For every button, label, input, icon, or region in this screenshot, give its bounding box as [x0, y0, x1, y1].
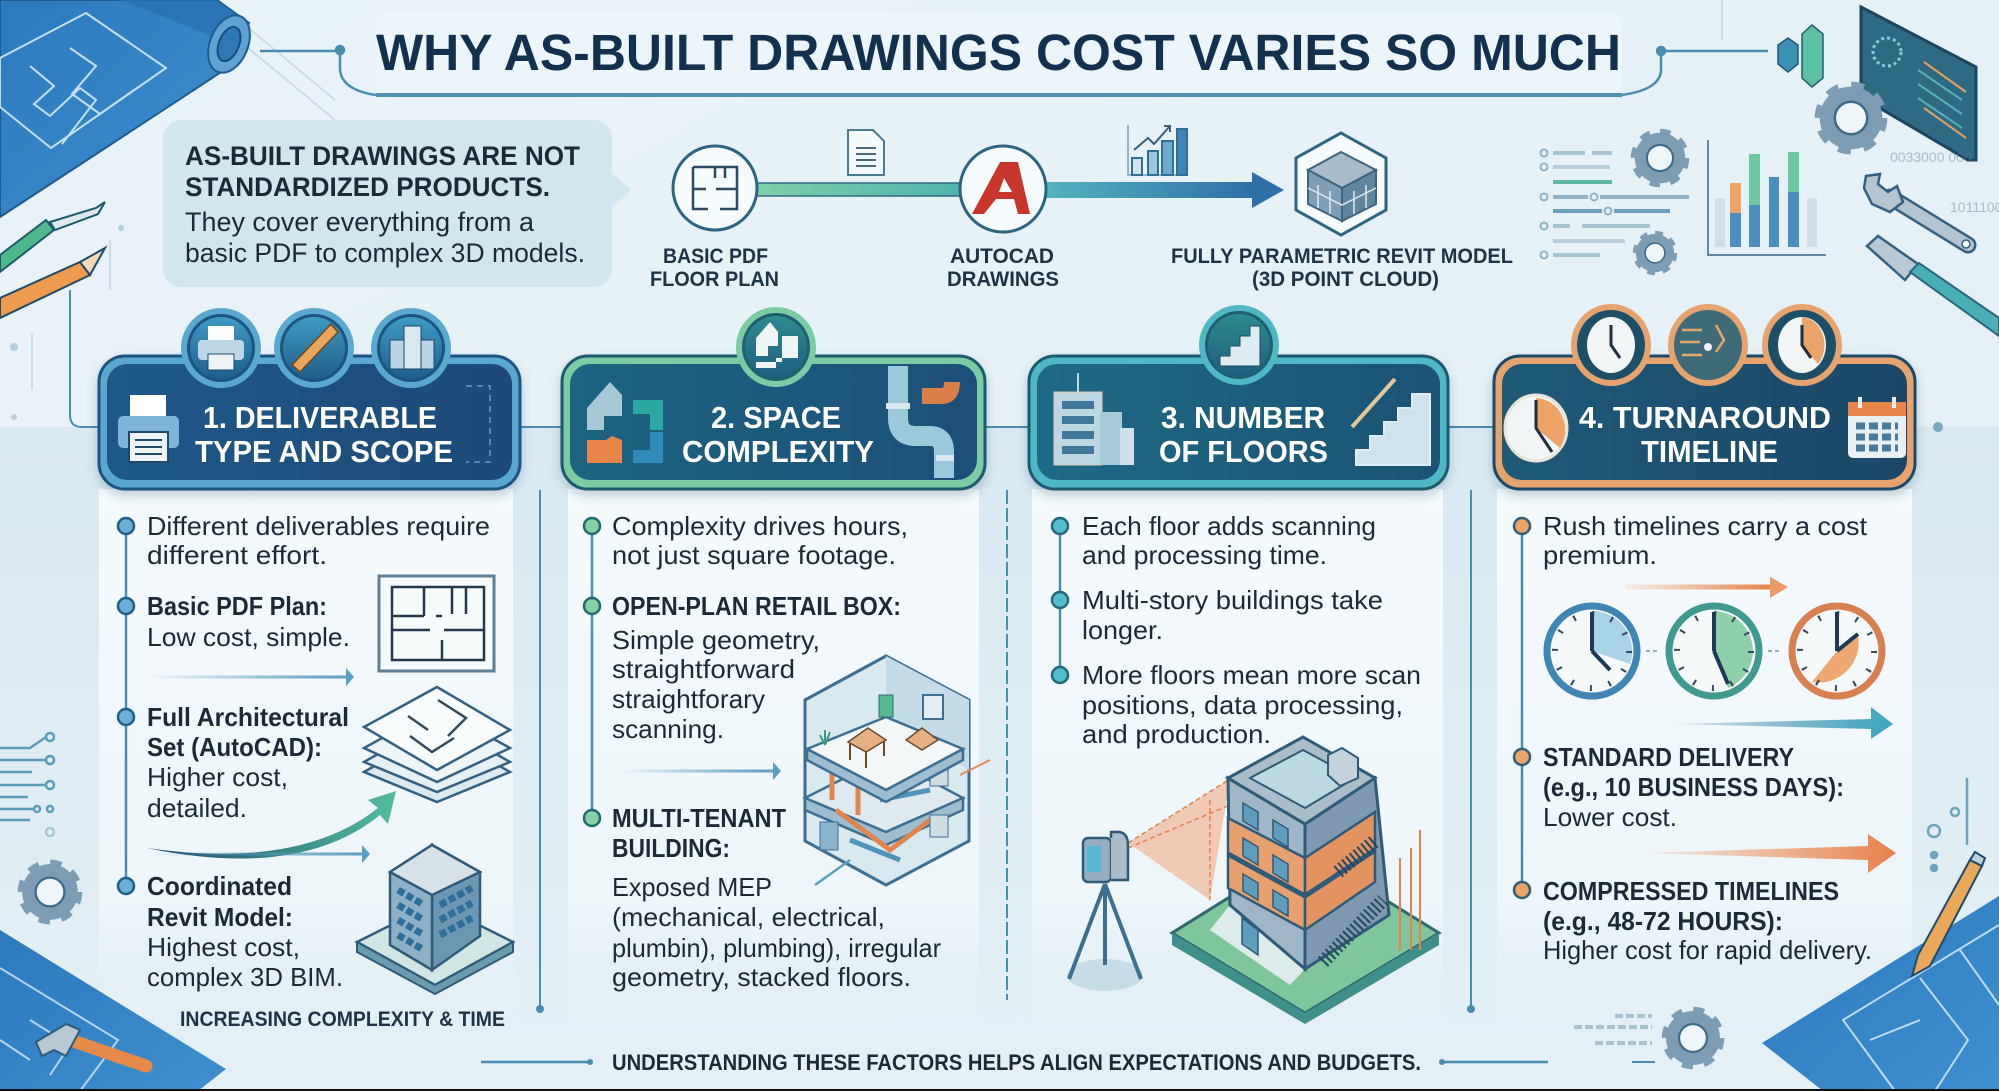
text: standard delivery: (e.g., 10 BUSINESS DAYS): [1543, 772, 1844, 802]
timeline rail [118, 518, 134, 894]
label: AutoCAD drawings: AUTOCAD [950, 245, 1054, 268]
left connector line [70, 290, 1494, 427]
text: coordinated Revit model: Highest cost, [147, 932, 300, 962]
illustration: stacked sheets [364, 687, 510, 802]
header card 4: TIMELINE [1641, 434, 1778, 469]
text: basic PDF plan: Low cost, simple. [147, 622, 350, 652]
text: open-plan retail box: straightforary [612, 684, 765, 714]
text: multi-tenant building: (mechanical, electrical, [612, 902, 885, 932]
icon: floor shapes [587, 382, 663, 463]
text: intro: different effort. [147, 540, 327, 570]
illustration: isometric building on platform [357, 845, 513, 994]
clock: blue [1547, 606, 1637, 696]
icon: calendar [1848, 397, 1906, 458]
header card 2: 2. SPACE [711, 400, 841, 435]
text: each floor: and processing time. [1082, 540, 1327, 570]
icon: stairs with pencil [1352, 379, 1430, 465]
icon: AutoCAD logo [960, 146, 1046, 232]
icon: cable plug [1867, 236, 1999, 336]
illustration: floor plan sheet [379, 576, 494, 671]
progress bar: green segment [755, 183, 965, 196]
arrow: small 1 [150, 668, 354, 686]
progress arrow [1040, 172, 1284, 208]
text: multi-tenant building: BUILDING: [612, 833, 730, 863]
divider 3 [1467, 490, 1475, 1013]
text: basic PDF plan: Basic PDF Plan: [147, 591, 327, 621]
text: multi-story: Multi-story buildings take [1082, 585, 1383, 615]
illustration: isometric building [1172, 737, 1439, 1024]
icon: clock [1505, 395, 1567, 461]
arrow: orange small [1625, 577, 1788, 598]
divider 1 [536, 490, 544, 1013]
title connector left [260, 46, 376, 95]
header card 3: OF FLOORS [1159, 434, 1328, 469]
header card 1 [99, 356, 520, 489]
footer arrow left [481, 1059, 593, 1065]
divider 2 [1006, 490, 1008, 1000]
footer text: UNDERSTANDING THESE FACTORS HELPS ALIGN EXPECTATIONS AND BUDGETS. [612, 1050, 1421, 1075]
text: full architectural set [147, 702, 349, 823]
text: more floors: More floors mean more scan [1082, 660, 1421, 690]
header card 1: TYPE AND SCOPE [195, 434, 453, 469]
panel: number of floors [1029, 305, 1448, 1039]
icon badge: building [371, 308, 451, 388]
title band [376, 12, 1622, 92]
corner illustration: blueprint roll [0, 0, 258, 217]
text: each floor: Each floor adds scanning [1082, 511, 1376, 541]
header card 4: 4. TURNAROUND [1579, 400, 1831, 435]
timeline rail [1052, 518, 1068, 683]
binary decoration [1890, 149, 1999, 215]
label: Revit model: (3D POINT CLOUD) [1252, 268, 1439, 291]
text: coordinated Revit model [147, 871, 343, 992]
title: WHY AS-BUILT DRAWINGS COST VARIES SO MUCH [376, 24, 1621, 81]
title connector right [1622, 47, 1768, 95]
illustration: laser scanner on tripod [1067, 779, 1230, 991]
arrow: orange large [1644, 834, 1896, 873]
arrow: small [622, 762, 781, 780]
header card 3: 3. NUMBER [1161, 400, 1325, 435]
text: standard delivery [1543, 742, 1844, 832]
clock: green [1669, 606, 1759, 696]
label: AutoCAD drawings: DRAWINGS [947, 268, 1059, 291]
icon: rising bar chart [1128, 125, 1188, 175]
text: multi-tenant building [612, 803, 941, 992]
timeline rail [584, 518, 600, 826]
side dots lower right [1928, 778, 1967, 871]
text: intro: Complexity drives hours, [612, 511, 908, 541]
text: each floor [1082, 511, 1376, 570]
text: multi-story: longer. [1082, 615, 1163, 645]
label: basic PDF floor plan: FLOOR PLAN [650, 268, 779, 291]
circuit decoration left [0, 733, 54, 836]
corner illustration: blueprint lower left [0, 930, 226, 1091]
text: multi-tenant building: geometry, stacked floors. [612, 962, 911, 992]
faint construction lines [32, 0, 1980, 390]
label: Revit model: FULLY PARAMETRIC REVIT MODEL [1171, 245, 1513, 268]
text: compressed timelines [1543, 876, 1872, 965]
icon: gear bottom [1664, 1009, 1722, 1067]
timeline rail [1514, 518, 1530, 898]
icon: office building [1054, 373, 1134, 465]
title rule [376, 93, 1622, 97]
text: standard delivery: STANDARD DELIVERY [1543, 742, 1794, 772]
panel: deliverable type and scope [99, 308, 520, 1039]
text: full architectural set: Set (AutoCAD): [147, 732, 322, 762]
corner illustration: blueprint lower right [1762, 896, 1999, 1091]
text: open-plan retail box [612, 591, 901, 744]
icon badge: ruler [274, 308, 354, 388]
text: multi-story [1082, 585, 1383, 645]
icon: Revit hexagon [1296, 133, 1386, 235]
chart: decorative bar chart [1708, 140, 1826, 255]
text: compressed timelines: Higher cost for rapid delivery. [1543, 935, 1872, 965]
icon badge: floor shapes [736, 307, 816, 387]
text: coordinated Revit model: Revit Model: [147, 902, 293, 932]
label: AutoCAD drawings [947, 245, 1059, 291]
icon: hammer [36, 1024, 146, 1066]
text: rush timelines [1543, 511, 1868, 570]
text: compressed timelines: (e.g., 48-72 HOURS): [1543, 906, 1783, 936]
icon: wrench [1864, 174, 1970, 248]
header card 3 [1029, 356, 1448, 489]
label: basic PDF floor plan: BASIC PDF [663, 245, 768, 268]
intro callout: AS-BUILT DRAWINGS ARE NOT [185, 141, 580, 171]
arrow: rising curve [147, 791, 396, 859]
icon badge: stairs [1199, 305, 1279, 385]
text: coordinated Revit model: complex 3D BIM. [147, 962, 343, 992]
connectors between clocks [1646, 650, 1782, 652]
header card 2 [562, 356, 985, 489]
icon badge: speed clock [1668, 304, 1748, 386]
text: multi-tenant building: Exposed MEP [612, 872, 772, 902]
icon: gear lower left [21, 863, 79, 921]
text: open-plan retail box: scanning. [612, 714, 724, 744]
arrow: small 2 [150, 845, 370, 863]
text: multi-tenant building: MULTI-TENANT [612, 803, 786, 833]
icon: basic PDF floor plan [673, 146, 757, 230]
bottom edge line [0, 1089, 1999, 1091]
text: compressed timelines: COMPRESSED TIMELINES [1543, 876, 1839, 906]
icon: orange pencil [0, 248, 105, 318]
text: open-plan retail box: Simple geometry, [612, 625, 820, 655]
text: intro [147, 511, 490, 570]
corner illustration: monitor and building blocks [1778, 7, 1976, 160]
intro callout: They cover everything from a [185, 207, 535, 237]
text: rush timelines: Rush timelines carry a cost [1543, 511, 1868, 541]
header card 1: 1. DELIVERABLE [203, 400, 437, 435]
icon badge: clock 1 [1571, 304, 1651, 386]
text: coordinated Revit model: Coordinated [147, 871, 292, 901]
icon badge: clock 3 [1762, 304, 1842, 386]
text: intro: Different deliverables require [147, 511, 490, 541]
text: rush timelines: premium. [1543, 540, 1657, 570]
text: more floors: and production. [1082, 719, 1271, 749]
panel: space complexity [562, 307, 990, 1039]
panel: turnaround timeline [1494, 304, 1915, 1039]
arrow: teal [1673, 707, 1893, 739]
intro callout: STANDARDIZED PRODUCTS. [185, 172, 550, 202]
text: multi-tenant building: plumbin), plumbing), irregular [612, 933, 941, 963]
caption: increasing complexity: INCREASING COMPLEXITY & TIME [180, 1008, 505, 1031]
intro callout: basic PDF to complex 3D models. [185, 238, 585, 268]
text: basic PDF plan [147, 591, 350, 652]
footer arrow right [1439, 1059, 1548, 1065]
small gears and progress lines [1540, 131, 1689, 273]
header card 2: COMPLEXITY [682, 434, 874, 469]
side decoration dots [10, 225, 1943, 432]
icon: printer [118, 395, 179, 462]
text: intro [612, 511, 908, 570]
icon badge: printer [181, 308, 261, 388]
icon: pencil lower right [1912, 852, 1985, 976]
icon: pipes [886, 366, 954, 478]
label: basic PDF floor plan [650, 245, 779, 291]
lines beside bottom gear [1574, 1016, 1655, 1062]
text: open-plan retail box: straightforward [612, 654, 795, 684]
binary decoration: 0033000 000 [1890, 149, 1972, 165]
label: Revit model [1171, 245, 1513, 291]
text: full architectural set: detailed. [147, 793, 247, 823]
intro callout [163, 120, 631, 287]
header card 4 [1494, 356, 1915, 489]
icon: document [848, 130, 884, 175]
text: standard delivery: Lower cost. [1543, 802, 1677, 832]
text: intro: not just square footage. [612, 540, 896, 570]
illustration: building cutaway [805, 656, 990, 885]
clock: orange [1792, 606, 1882, 696]
text: full architectural set: Higher cost, [147, 762, 288, 792]
text: full architectural set: Full Architectural [147, 702, 349, 732]
text: open-plan retail box: OPEN-PLAN RETAIL BOX: [612, 591, 901, 621]
text: more floors [1082, 660, 1421, 749]
icon: green pencil [0, 202, 105, 272]
lower background band [0, 427, 1999, 1091]
text: more floors: positions, data processing, [1082, 690, 1403, 720]
